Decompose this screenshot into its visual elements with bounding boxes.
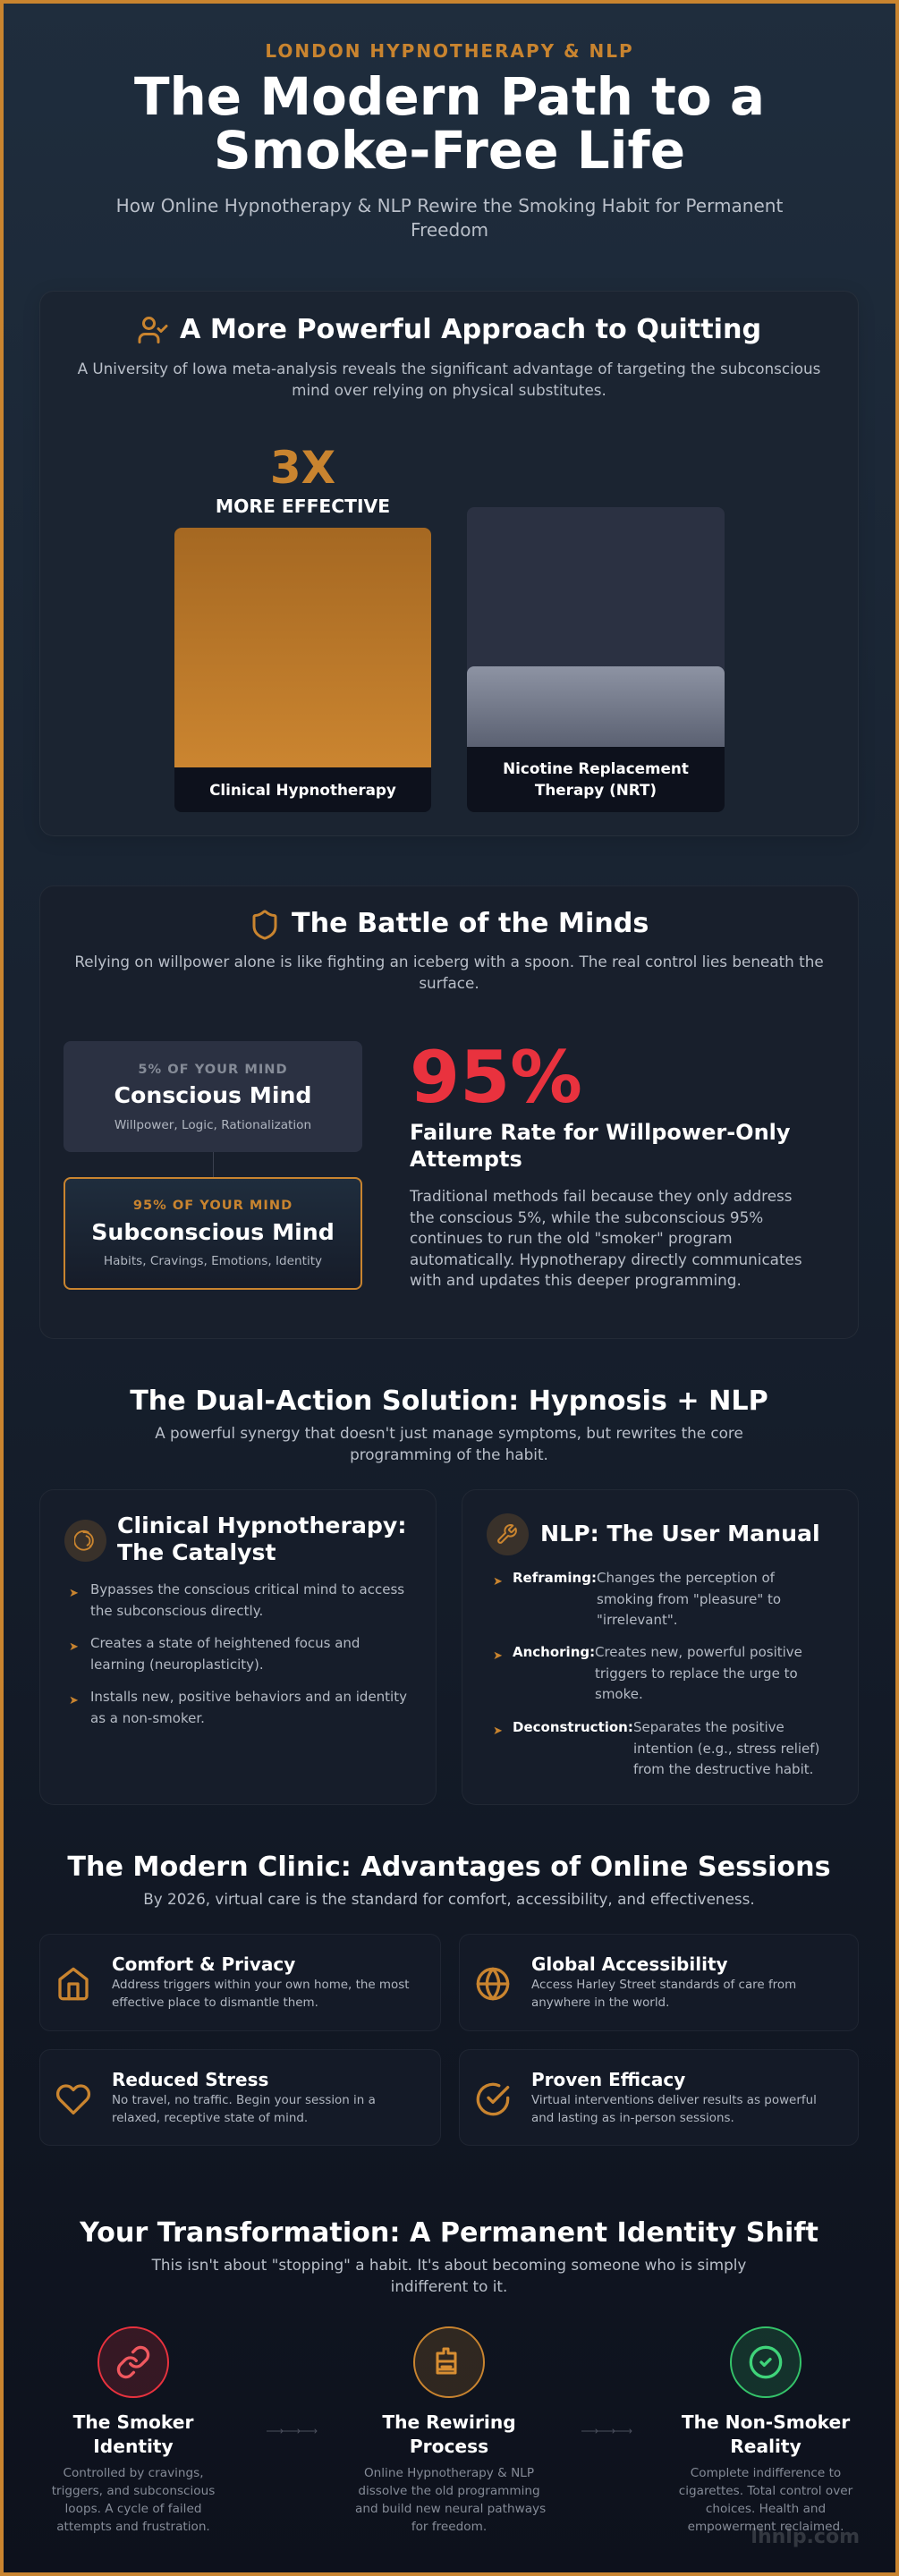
step text: and build new neural pathways [355,2502,546,2516]
step: rewiring process [355,2326,546,2534]
stat description [410,1187,802,1289]
header [116,40,783,241]
icon: user check [138,317,168,343]
description: This isn't about "stopping" a habit. It's about becoming someone who is simply [152,2256,746,2274]
step text: attempts and frustration. [56,2520,210,2534]
card text [112,1979,410,2010]
connector [213,1152,214,1177]
box: subconscious mind: 95% OF YOUR MIND [133,1198,293,1213]
section heading: dual action: The Dual-Action Solution: Hypnosis + NLP [130,1385,768,1417]
card title [117,1513,406,1565]
bar label [467,747,725,812]
bullet list: Separates the positive [633,1719,785,1735]
bar chart [174,442,725,812]
title: Smoke-Free Life [214,120,685,181]
step title [73,2411,193,2457]
bar: NRT [467,507,725,812]
bullet list: Creates a state of heightened focus and [90,1635,360,1651]
box: subconscious mind [64,1177,362,1290]
section heading: transformation [79,2217,818,2295]
bullet list: smoke. [595,1686,643,1702]
arrow [581,2429,632,2433]
bullet list: ➤ [69,1587,79,1600]
bullet list: Reframing: [513,1570,597,1586]
bullet list: Installs new, positive behaviors and an identity [90,1689,407,1705]
bar: clinical hypnotherapy [174,528,431,812]
step: smoker identity [52,2326,215,2534]
card title: Proven Efficacy [531,2069,685,2090]
bullet list: intention (e.g., stress relief) [633,1741,819,1757]
stat: 3X: 3X [270,442,335,494]
box: subconscious mind: Habits, Cravings, Emotions, Identity [104,1254,322,1268]
box: subconscious mind: Subconscious Mind [91,1219,335,1245]
step text: Online Hypnotherapy & NLP [364,2466,534,2480]
step text: Controlled by cravings, [63,2466,204,2480]
panel: NLP [462,1489,859,1805]
step text: triggers, and subconscious [52,2484,215,2498]
bullet list: Creates new, powerful positive [595,1644,802,1660]
section heading: modern clinic: The Modern Clinic: Advantages of Online Sessions [67,1852,831,1883]
description [74,953,824,991]
stat label: MORE EFFECTIVE [216,496,390,517]
kicker: LONDON HYPNOTHERAPY & NLP [265,40,634,62]
card: global accessibility [459,1934,859,2031]
bullet list: Deconstruction: [513,1719,633,1735]
card text [112,2094,376,2125]
heading: A More Powerful Approach to Quitting [180,314,761,345]
step text [679,2466,853,2534]
title [134,66,765,181]
stat description: continues to run the old "smoker" program [410,1229,733,1247]
panel: battle of the minds [39,886,859,1339]
description: mind over relying on physical substitutes. [292,381,606,399]
box: conscious mind: Willpower, Logic, Rationalization [114,1118,311,1132]
step text: choices. Health and [706,2502,826,2516]
bullet list: ➤ [493,1724,503,1738]
icon: chain link [98,2326,169,2398]
step title: Reality [730,2436,801,2457]
step title: The Rewiring [382,2411,516,2433]
card: proven efficacy [459,2049,859,2146]
description: programming of the habit. [350,1445,548,1463]
card: comfort and privacy [39,1934,441,2031]
icon: check circle [476,2082,510,2116]
bullet list: ➤ [69,1640,79,1654]
icon: catalyst [64,1520,106,1562]
description: A University of Iowa meta-analysis reveals the significant advantage of targeting the subconscious [78,360,820,377]
description: By 2026, virtual care is the standard for comfort, accessibility, and effectiveness. [143,1890,755,1908]
icon: paint brush [413,2326,485,2398]
step text: loops. A cycle of failed [65,2502,201,2516]
bullet list: ➤ [69,1694,79,1707]
bar label: Nicotine Replacement [503,759,689,777]
section heading: modern clinic [67,1852,831,1908]
description [152,2256,746,2295]
icon: home [58,1968,89,2000]
section heading: dual action [130,1385,768,1463]
subtitle: Freedom [411,219,488,241]
card text [531,2094,817,2125]
stat description: with and updates this deeper programming. [410,1271,742,1289]
step: non-smoker reality [679,2326,853,2534]
description: surface. [419,973,479,991]
bullet list: the subconscious directly. [90,1603,263,1619]
box: conscious mind [64,1041,362,1152]
description [77,360,820,399]
arrow [267,2429,317,2433]
bullet list: from the destructive habit. [633,1761,813,1777]
bullet list: ➤ [493,1649,503,1663]
card text: relaxed, receptive state of mind. [112,2112,308,2125]
subtitle: How Online Hypnotherapy & NLP Rewire the Smoking Habit for Permanent [116,195,783,216]
step text: dissolve the old programming [358,2484,540,2498]
icon: shield [252,910,277,939]
stat description: automatically. Hypnotherapy directly communicates [410,1250,802,1268]
bar label: Therapy (NRT) [535,780,657,798]
bullet list: smoking from "pleasure" to [597,1590,781,1606]
stat heading: Failure Rate for Willpower-Only [410,1120,791,1145]
step title [382,2411,516,2457]
card text: Address triggers within your own home, the most [112,1979,410,1992]
step text: for freedom. [411,2520,487,2534]
stat heading [410,1120,791,1172]
bullet list: learning (neuroplasticity). [90,1657,264,1673]
step text: empowerment reclaimed. [688,2520,844,2534]
icon: heart [55,2084,91,2114]
step title: Identity [93,2436,174,2457]
heading: The Battle of the Minds [292,908,649,939]
stat description: the conscious 5%, while the subconscious 95% [410,1208,763,1225]
card text: Access Harley Street standards of care from [531,1979,796,1992]
stat: 95%: 95% [410,1036,582,1120]
stat description: Traditional methods fail because they only address [410,1187,793,1205]
card text: No travel, no traffic. Begin your session in a [112,2094,376,2107]
bullet list: Changes the perception of [597,1570,775,1586]
description: A powerful synergy that doesn't just manage symptoms, but rewrites the core [155,1424,743,1442]
step text [52,2466,215,2534]
card title: The Catalyst [117,1539,276,1565]
box: conscious mind: Conscious Mind [114,1082,311,1108]
step title: The Non-Smoker [682,2411,850,2433]
bullet list: triggers to replace the urge to [595,1665,798,1682]
step text: Complete indifference to [691,2466,841,2480]
card text: effective place to dismantle them. [112,1996,318,2010]
panel: more powerful approach [39,291,859,836]
subtitle [116,195,783,241]
bar label: Clinical Hypnotherapy [209,781,396,799]
step text: cigarettes. Total control over [679,2484,852,2498]
card title: Global Accessibility [531,1953,728,1975]
card text: Virtual interventions deliver results as powerful [531,2094,817,2107]
title: The Modern Path to a [134,66,765,127]
card text: anywhere in the world. [531,1996,669,2010]
card: reduced stress [39,2049,441,2146]
bullet list [69,1581,407,1726]
card text: and lasting as in-person sessions. [531,2112,734,2125]
description: indifferent to it. [391,2277,507,2295]
bullet list [493,1570,819,1777]
step title: Process [410,2436,488,2457]
step title: The Smoker [73,2411,193,2433]
stat heading: Attempts [410,1147,522,1172]
bullet list: Bypasses the conscious critical mind to access [90,1581,404,1597]
box: conscious mind: 5% OF YOUR MIND [138,1062,288,1077]
bullet list: as a non-smoker. [90,1710,205,1726]
step text [355,2466,546,2534]
card title: Reduced Stress [112,2069,268,2090]
icon: wrench [487,1513,529,1555]
description: Relying on willpower alone is like fighting an iceberg with a spoon. The real control lies beneath the [74,953,824,970]
watermark: lhnlp.com [751,2526,860,2548]
bullet list: "irrelevant". [597,1612,678,1628]
icon: badge check [730,2326,801,2398]
panel: clinical hypnotherapy [39,1489,437,1805]
icon: globe [476,1968,510,2000]
step title [682,2411,850,2457]
card text [531,1979,796,2010]
card title: Comfort & Privacy [112,1953,295,1975]
description [155,1424,743,1463]
card title: Clinical Hypnotherapy: [117,1513,406,1538]
bullet list: Anchoring: [513,1644,595,1660]
card title: NLP: The User Manual [540,1521,820,1546]
section heading: transformation: Your Transformation: A Permanent Identity Shift [80,2217,818,2249]
bullet list: ➤ [493,1575,503,1589]
